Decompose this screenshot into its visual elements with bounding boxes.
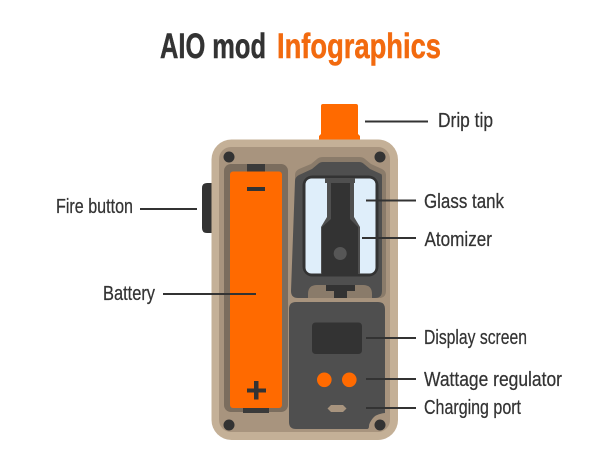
charging port bbox=[328, 405, 346, 412]
device body bbox=[212, 140, 398, 440]
inner frame bbox=[219, 147, 390, 432]
battery bbox=[230, 164, 282, 413]
plus sign bbox=[247, 381, 266, 400]
label: glass tank: Glass tank bbox=[424, 190, 505, 213]
leader lines bbox=[140, 122, 428, 408]
battery holder bbox=[224, 164, 288, 412]
labels bbox=[56, 109, 562, 419]
label: fire button: Fire button bbox=[56, 195, 133, 218]
title bbox=[160, 27, 441, 66]
control panel bbox=[289, 302, 385, 429]
display screen bbox=[312, 322, 362, 354]
label: atomizer: Atomizer bbox=[424, 228, 492, 251]
tank housing bbox=[291, 157, 386, 298]
atomizer bbox=[321, 178, 360, 274]
glass tank bbox=[302, 176, 378, 276]
label: drip tip: Drip tip bbox=[438, 109, 493, 132]
wattage buttons bbox=[317, 372, 332, 387]
screws bbox=[224, 152, 386, 430]
minus sign bbox=[247, 187, 265, 191]
label: battery: Battery bbox=[103, 282, 156, 305]
tank base bbox=[308, 285, 372, 298]
label: display screen: Display screen bbox=[424, 326, 527, 349]
drip tip bbox=[319, 104, 360, 140]
title: AIO mod bbox=[160, 27, 266, 66]
label: wattage regulator: Wattage regulator bbox=[424, 368, 562, 391]
AIO mod device bbox=[202, 104, 398, 440]
title: Infographics bbox=[277, 27, 441, 66]
label: charging port: Charging port bbox=[424, 396, 521, 419]
fire button bbox=[202, 183, 212, 233]
